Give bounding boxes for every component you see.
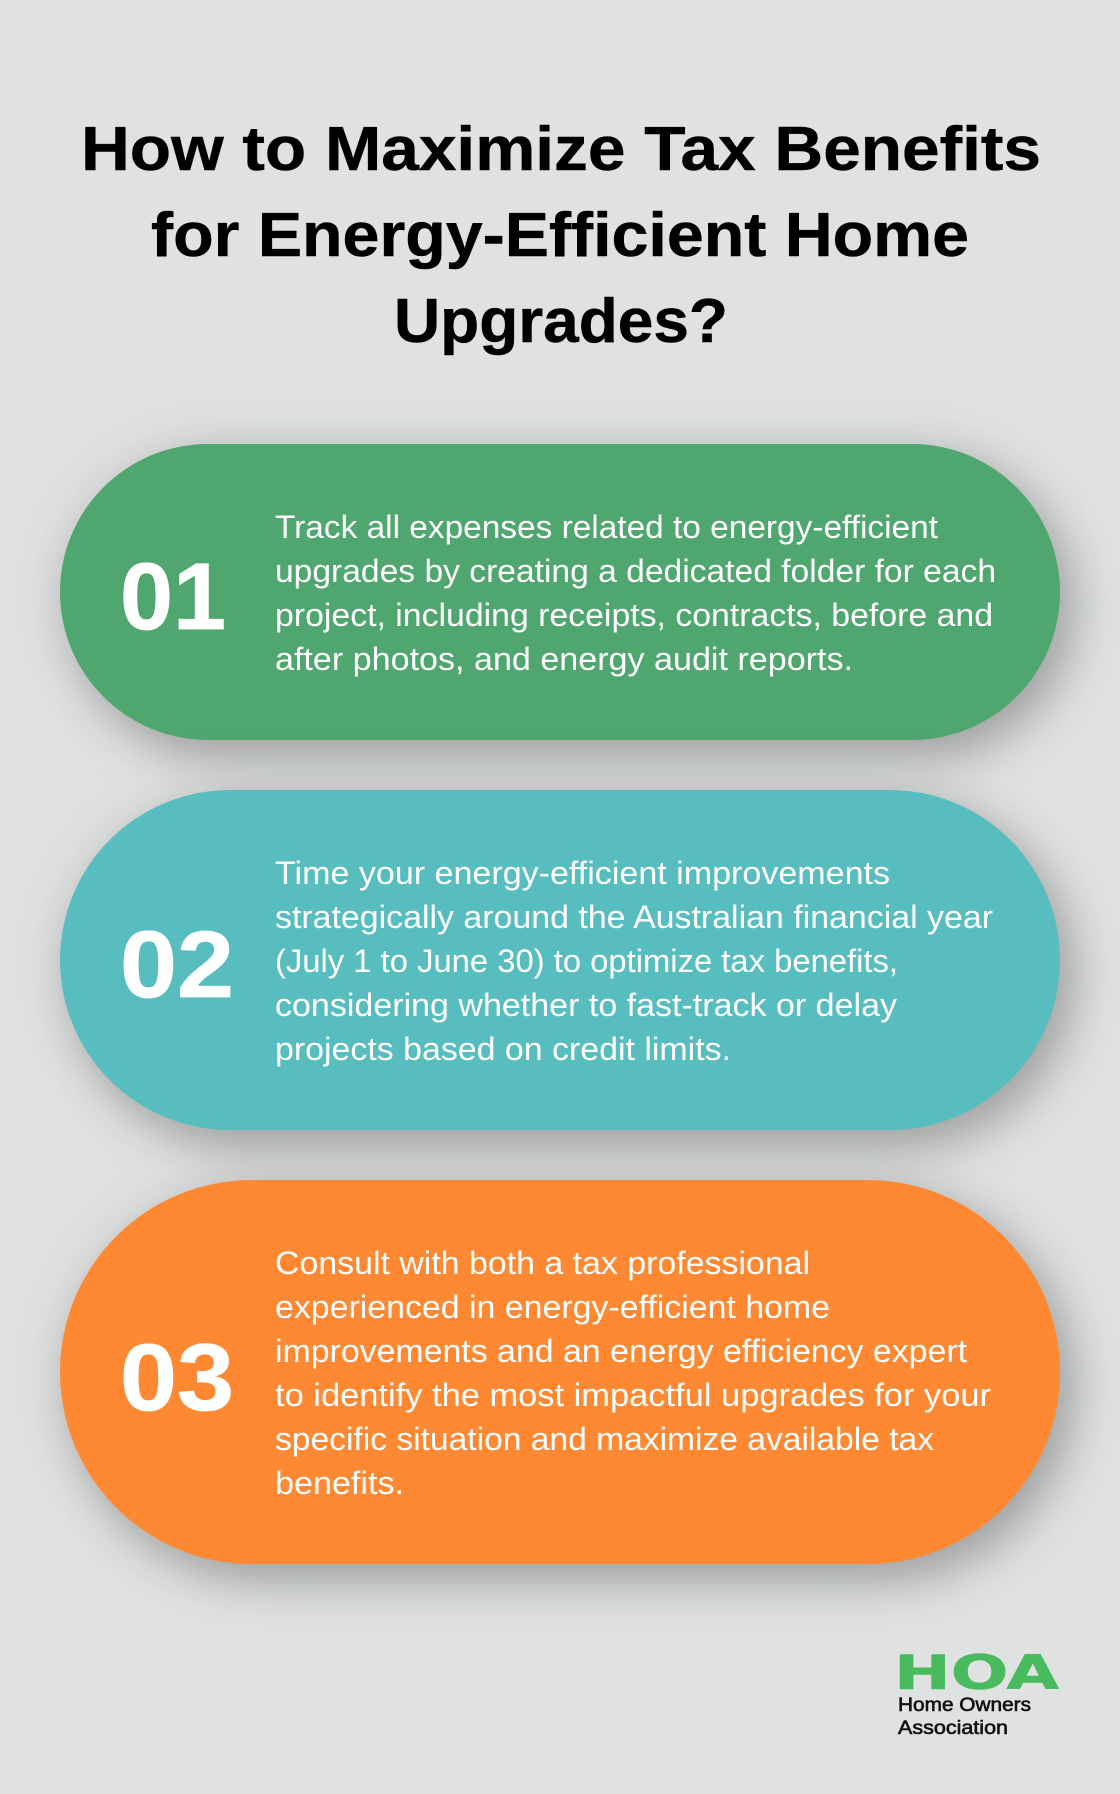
- step 01 text: upgrades by creating a dedicated folder for each: [275, 553, 996, 589]
- step 03 text: [275, 1245, 991, 1501]
- orange pill background: [60, 1180, 1060, 1564]
- panel: step 03: [60, 1180, 1060, 1564]
- teal pill background: [60, 790, 1060, 1130]
- step 02 text: considering whether to fast-track or delay: [275, 987, 897, 1023]
- step 02 text: [275, 855, 993, 1067]
- title: [81, 115, 1041, 356]
- step 01 text: [275, 509, 996, 677]
- title: Upgrades?: [394, 287, 728, 356]
- logo tagline: [898, 1695, 1031, 1739]
- step 01 text: Track all expenses related to energy-efficient: [275, 509, 938, 545]
- step 02 text: strategically around the Australian financial year: [275, 899, 993, 935]
- logo wordmark HOA: HOA: [894, 1646, 1060, 1701]
- step 02 text: Time your energy-efficient improvements: [275, 855, 890, 891]
- logo: HOA Home Owners Association: [894, 1646, 1060, 1739]
- step 02 text: (July 1 to June 30) to optimize tax benefits,: [275, 943, 898, 979]
- green pill background: [60, 444, 1060, 740]
- step 03 text: to identify the most impactful upgrades for your: [275, 1377, 991, 1413]
- title: for Energy-Efficient Home: [151, 201, 969, 270]
- panel: step 01: [60, 444, 1060, 740]
- step 01 text: after photos, and energy audit reports.: [275, 641, 853, 677]
- panel: step 02: [60, 790, 1060, 1130]
- number 02: 02: [120, 912, 234, 1018]
- step 01 text: project, including receipts, contracts, before and: [275, 597, 993, 633]
- logo tagline: Home Owners: [898, 1695, 1031, 1716]
- title: How to Maximize Tax Benefits: [81, 115, 1041, 184]
- step 03 text: benefits.: [275, 1465, 404, 1501]
- number 01: 01: [120, 544, 226, 650]
- step 03 text: specific situation and maximize available tax: [275, 1421, 934, 1457]
- step 03 text: experienced in energy-efficient home: [275, 1289, 830, 1325]
- logo tagline: Association: [898, 1718, 1008, 1739]
- number 03: 03: [120, 1325, 234, 1431]
- step 03 text: Consult with both a tax professional: [275, 1245, 810, 1281]
- step 02 text: projects based on credit limits.: [275, 1031, 731, 1067]
- step 03 text: improvements and an energy efficiency expert: [275, 1333, 967, 1369]
